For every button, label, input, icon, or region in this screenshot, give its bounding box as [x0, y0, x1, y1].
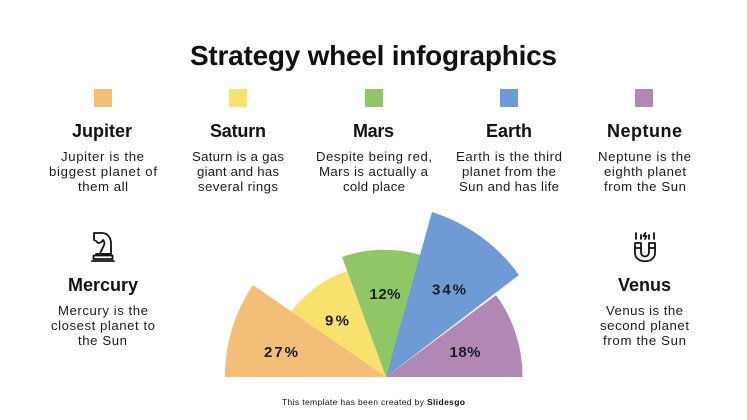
- chart: semicircular strategy wheel: [225, 212, 523, 377]
- panel: Venus: [600, 233, 689, 348]
- panel: Earth: [456, 89, 562, 194]
- heading: Mars: Mars: [353, 121, 394, 141]
- text: Neptune description: eighth planet: [604, 164, 686, 179]
- icon: magnet: [635, 233, 655, 261]
- text: Mercury description: Mercury is the: [58, 303, 148, 318]
- label: 12%: 12%: [370, 286, 400, 303]
- text: Mercury description: closest planet to: [51, 318, 155, 333]
- footer credit: This template has been created by Slidesgo: [282, 397, 465, 407]
- heading: Earth: Earth: [486, 121, 532, 141]
- heading: Neptune: Neptune: [607, 121, 682, 141]
- label: 34%: 34%: [432, 282, 466, 298]
- heading: Jupiter: Jupiter: [72, 121, 132, 141]
- text: Mars description: cold place: [343, 179, 405, 194]
- text: Neptune description: from the Sun: [604, 179, 686, 194]
- text: Jupiter description: them all: [78, 179, 128, 194]
- text: Mars description: Despite being red,: [316, 149, 432, 164]
- text: Mars description: [316, 149, 432, 194]
- color swatch: Saturn: [229, 89, 247, 107]
- text: Venus description: [600, 303, 689, 348]
- text: Jupiter description: biggest planet of: [49, 164, 157, 179]
- heading: Saturn: Saturn: [210, 121, 266, 141]
- text: Neptune description: [598, 149, 691, 194]
- icon: chess knight: [92, 233, 114, 261]
- segment: Neptune 18%: [386, 295, 523, 377]
- label: 27%: 27%: [264, 344, 298, 361]
- label: 18%: 18%: [450, 344, 480, 361]
- text: Mars description: Mars is actually a: [319, 164, 429, 179]
- heading: Venus: Venus: [618, 275, 671, 295]
- color swatch: Jupiter: [94, 89, 112, 107]
- text: Jupiter description: Jupiter is the: [61, 149, 144, 164]
- heading: Mercury: Mercury: [68, 275, 138, 295]
- text: Saturn description: several rings: [198, 179, 278, 194]
- label: 9%: 9%: [325, 312, 349, 330]
- text: Saturn description: giant and has: [197, 164, 279, 179]
- text: Mercury description: [51, 303, 155, 348]
- panel: Jupiter: [49, 89, 157, 194]
- text: Venus description: from the Sun: [603, 333, 686, 348]
- text: Earth description: [456, 149, 562, 194]
- panel: Mercury: [51, 233, 155, 348]
- segment: Mars 12%: [342, 250, 421, 377]
- text: Jupiter description: [49, 149, 157, 194]
- text: Earth description: Earth is the third: [456, 149, 562, 164]
- text: Saturn description: [192, 149, 284, 194]
- text: Saturn description: Saturn is a gas: [192, 149, 284, 164]
- title: Strategy wheel infographics: [190, 40, 557, 71]
- text: Mercury description: the Sun: [78, 333, 127, 348]
- color swatch: Neptune: [635, 89, 653, 107]
- text: Venus description: second planet: [600, 318, 689, 333]
- segment: Earth 34%: [386, 212, 519, 377]
- text: Neptune description: Neptune is the: [598, 149, 691, 164]
- segment: Jupiter 27%: [225, 285, 386, 377]
- color swatch: Earth: [500, 89, 518, 107]
- text: Venus description: Venus is the: [606, 303, 683, 318]
- panel: Mars: [316, 89, 432, 194]
- text: Earth description: Sun and has life: [459, 179, 559, 194]
- text: Earth description: planet from the: [462, 164, 556, 179]
- panel: Neptune: [598, 89, 691, 194]
- panel: Saturn: [192, 89, 284, 194]
- segment: Saturn 9%: [291, 271, 386, 377]
- color swatch: Mars: [365, 89, 383, 107]
